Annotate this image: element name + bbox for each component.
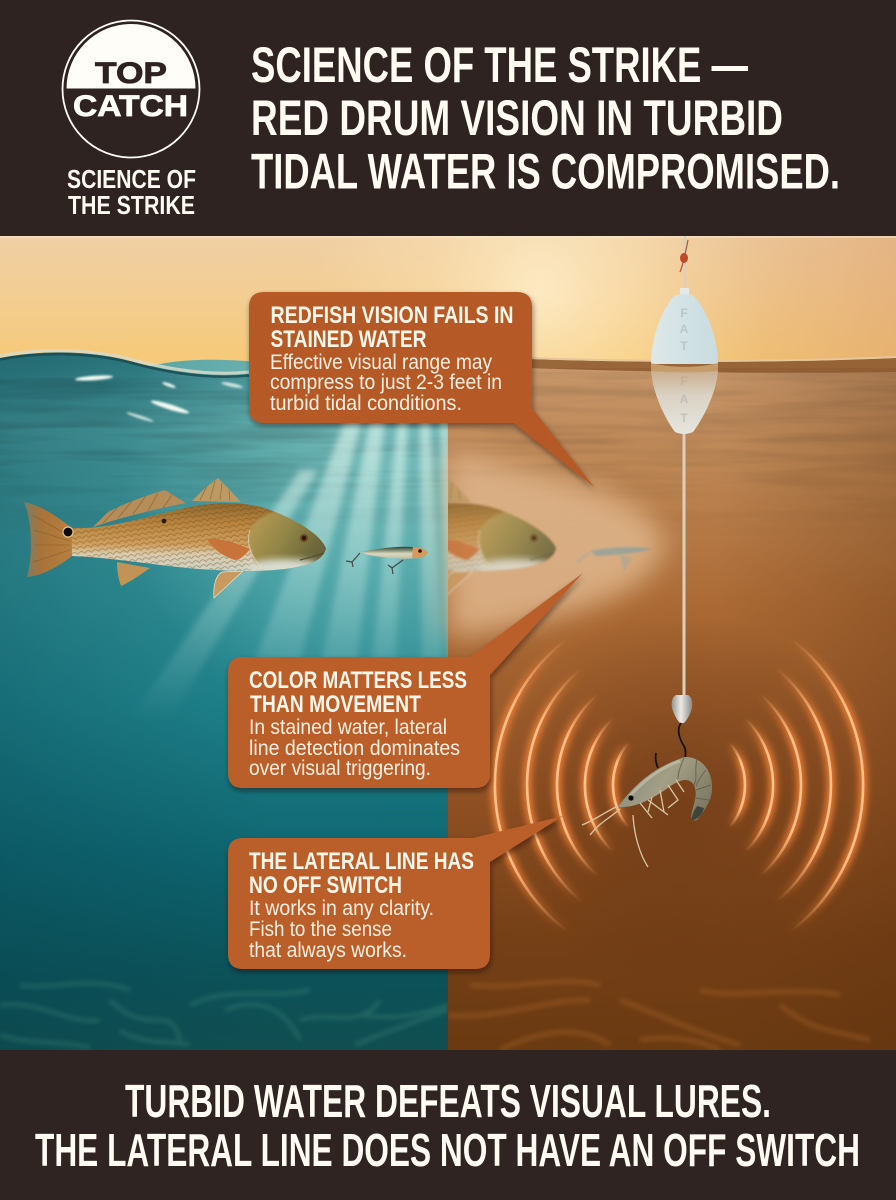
panel: clear water (left) — [0, 351, 470, 1050]
callout text: over visual triggering. — [249, 757, 431, 780]
logo caption: SCIENCE OF — [67, 164, 196, 194]
fishing line — [684, 236, 685, 698]
sky — [0, 236, 896, 372]
surface band — [530, 358, 896, 373]
callout text: line detection dominates — [249, 737, 460, 760]
callout text: STAINED WATER — [270, 326, 427, 353]
footer band — [0, 1050, 896, 1200]
callout: lateral line — [228, 816, 563, 969]
icon: float: A — [680, 392, 689, 406]
icon: hook and shrimp — [582, 723, 712, 867]
callout text: that always works. — [249, 939, 407, 962]
icon: float: A — [680, 322, 689, 336]
icon: float: F — [680, 306, 688, 320]
light rays — [151, 423, 448, 700]
callout text: THE LATERAL LINE HAS — [249, 848, 474, 875]
callout text: Effective visual range may — [270, 351, 492, 374]
callout text: turbid tidal conditions. — [270, 392, 462, 415]
icon: float: T — [680, 411, 688, 425]
surface streaks — [0, 378, 448, 513]
callout: vision — [249, 292, 594, 487]
logo caption: THE STRIKE — [68, 190, 195, 220]
header band — [0, 0, 896, 236]
icon: float — [651, 288, 718, 434]
surface streaks — [448, 372, 896, 486]
icon: bullet sinker — [672, 695, 692, 723]
icon: lure, ghost view — [577, 547, 652, 572]
callout text: THAN MOVEMENT — [250, 691, 421, 718]
callout text — [249, 667, 467, 780]
panel: stained water (right) — [448, 357, 896, 1050]
callout text: NO OFF SWITCH — [249, 872, 402, 899]
sonar rings — [495, 638, 863, 932]
logo: Top Catch: TOP — [95, 57, 167, 90]
seabed caustics — [0, 983, 448, 1048]
surface crest — [0, 354, 249, 377]
icon: stopper knot — [680, 240, 688, 272]
callout text: REDFISH VISION FAILS IN — [270, 302, 514, 329]
icon: lure, clear view — [346, 547, 428, 574]
logo caption — [67, 164, 196, 220]
footer text — [35, 1075, 860, 1176]
icon: float: T — [680, 339, 688, 353]
callout text: compress to just 2-3 feet in — [270, 371, 502, 394]
callout text — [270, 302, 514, 415]
haze around ghost lure — [448, 450, 665, 640]
callout text: In stained water, lateral — [249, 716, 447, 739]
icon: float: F — [680, 374, 688, 388]
callout text — [249, 848, 474, 962]
callout text: Fish to the sense — [249, 918, 392, 941]
logo: Top Catch — [62, 20, 200, 158]
logo: Top Catch: CATCH — [73, 90, 188, 123]
callout: color vs movement — [228, 573, 583, 788]
icon: red drum, blurred view — [448, 482, 557, 596]
icon: red drum, clear view — [24, 478, 330, 598]
title — [251, 36, 840, 200]
callout text: It works in any clarity. — [249, 897, 434, 920]
callout text: COLOR MATTERS LESS — [249, 667, 467, 694]
surface glints — [75, 374, 243, 423]
seabed silt — [448, 981, 870, 1050]
